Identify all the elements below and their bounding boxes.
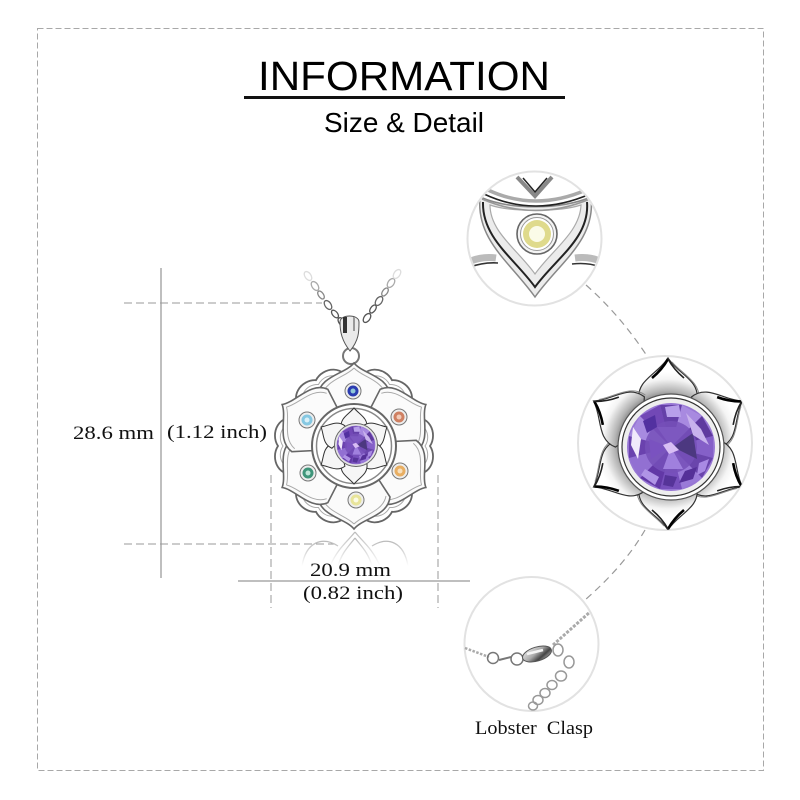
orange stone (392, 463, 408, 479)
width dimension lines (238, 475, 470, 608)
yellow stone (517, 214, 557, 254)
extension chain (528, 644, 574, 710)
detail circle: heart setting with yellow stone (468, 172, 602, 306)
height label: 28.6 mm (73, 423, 154, 444)
width label (303, 560, 403, 604)
width label: 20.9 mm (310, 560, 391, 581)
chain (465, 612, 590, 657)
top v-shaped setting (517, 177, 552, 196)
clasp caption: Lobster Clasp (475, 718, 593, 739)
arc bands (488, 190, 586, 201)
height label: (1.12 inch) (167, 422, 267, 443)
light blue stone (299, 412, 315, 428)
height label (73, 422, 267, 444)
bezel (618, 394, 724, 500)
height dimension lines (124, 268, 335, 578)
blue stone (345, 383, 361, 399)
chain (303, 268, 402, 328)
title: INFORMATION (258, 53, 550, 99)
detail circle: centre amethyst flower (578, 356, 758, 530)
pendant reflection (302, 532, 408, 566)
green stone (300, 465, 316, 481)
pendant (264, 316, 444, 529)
amethyst (627, 403, 715, 491)
pendant lotus petals (264, 363, 444, 529)
yellow stone (348, 492, 364, 508)
flower petals (592, 357, 742, 530)
dashed connector arcs (585, 285, 647, 600)
heart body (480, 197, 591, 297)
detail circle: lobster clasp (464, 577, 598, 711)
title underline (244, 96, 565, 99)
orange-red stone (391, 409, 407, 425)
width label: (0.82 inch) (303, 583, 403, 604)
side chain bars (468, 258, 602, 268)
lobster clasp body (521, 643, 553, 665)
jump rings (488, 652, 523, 665)
pendant bail (340, 316, 359, 364)
subtitle: Size & Detail (324, 107, 484, 138)
pendant centre amethyst (337, 426, 375, 464)
